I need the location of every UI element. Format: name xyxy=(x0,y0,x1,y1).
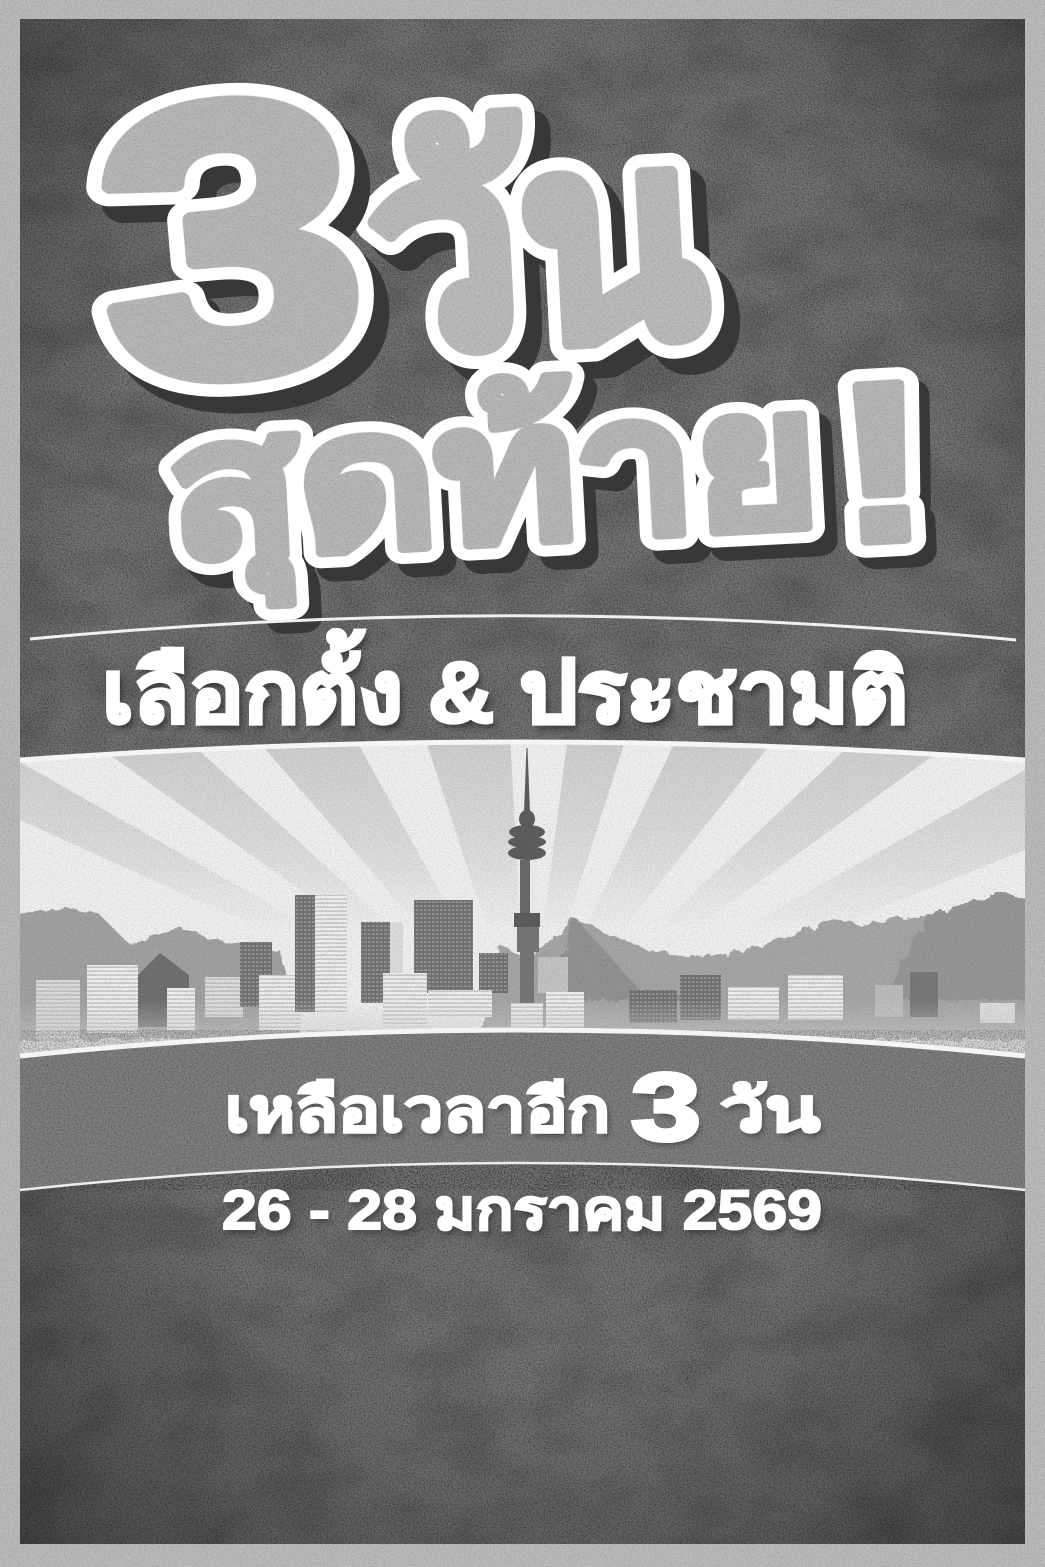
skyline panel top edge xyxy=(20,742,1025,760)
countdown text: เหลือเวลาอีก xyxy=(225,1077,610,1144)
numeral 3: 3 xyxy=(81,12,380,465)
numeral 3: 3 xyxy=(97,29,395,481)
exclamation mark: ! xyxy=(830,334,935,590)
date: 26 - 28 มกราคม 2569 xyxy=(222,1178,822,1241)
lower band xyxy=(20,1030,1025,1190)
word สุดท้าย: สุดท้าย xyxy=(164,352,824,610)
title: 3 วัน xyxy=(81,11,729,483)
เหลือเวลาอีก: เหลือเวลาอีก xyxy=(228,1081,613,1148)
exclamation mark: ! xyxy=(841,345,946,602)
date: 26 - 28 มกราคม 2569 xyxy=(225,1182,825,1245)
word สุดท้าย: สุดท้าย xyxy=(176,366,837,623)
วัน: วัน xyxy=(723,1081,823,1148)
subtitle: เลือกตั้ง & ประชามติ xyxy=(106,634,912,746)
word วัน: วัน xyxy=(377,96,729,425)
large 3: 3 xyxy=(634,1058,704,1165)
word วัน: วัน xyxy=(361,79,713,409)
title: สุดท้าย ! xyxy=(163,333,946,637)
countdown text: วัน xyxy=(720,1077,820,1144)
countdown text: 3 xyxy=(631,1054,701,1161)
mountains xyxy=(10,893,1035,1040)
buildings xyxy=(36,895,1015,1040)
word วัน: วัน xyxy=(361,79,713,409)
arc divider above subtitle xyxy=(30,616,1016,640)
sun rays xyxy=(20,744,1025,896)
skyline panel xyxy=(20,744,1025,1054)
countdown text xyxy=(225,1054,823,1165)
numeral 3: 3 xyxy=(81,12,380,465)
word สุดท้าย: สุดท้าย xyxy=(164,352,824,610)
tower xyxy=(508,748,546,1007)
mist at base of city xyxy=(20,1006,1025,1054)
subtitle: เลือกตั้ง & ประชามติ xyxy=(102,629,908,741)
exclamation mark: ! xyxy=(830,334,935,590)
